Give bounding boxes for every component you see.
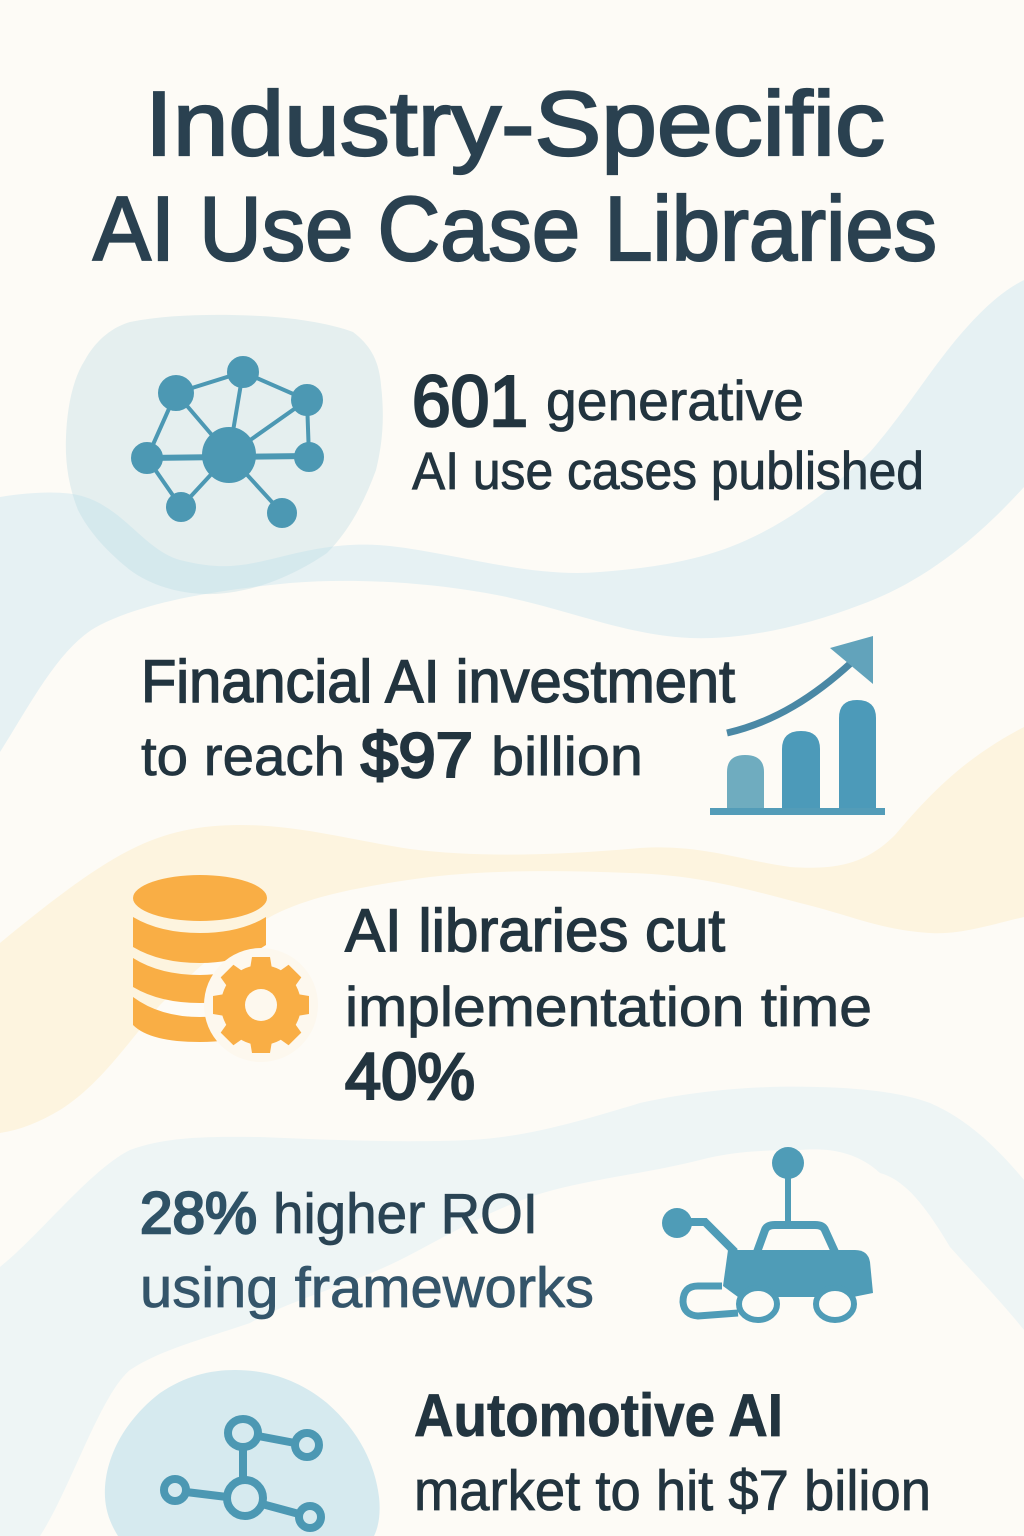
icon: linked nodes <box>164 1419 321 1528</box>
stat text: billion <box>491 725 643 787</box>
panel: financial <box>141 636 885 815</box>
stat text <box>140 1181 594 1320</box>
stat text: using frameworks <box>140 1256 594 1320</box>
icon: network <box>133 358 322 526</box>
stat text: Financial AI investment <box>141 648 735 715</box>
panel: automotive <box>105 1370 931 1536</box>
stat text: generative <box>546 369 804 432</box>
stat text: AI libraries cut <box>345 897 725 964</box>
stat text <box>414 1382 931 1523</box>
stat text: market to hit $7 bilion <box>414 1459 931 1523</box>
icon: database with gear <box>133 875 318 1062</box>
title: Industry-Specific <box>145 74 885 175</box>
stat text: AI use cases published <box>412 442 924 501</box>
title <box>93 74 937 280</box>
stat text: 40% <box>345 1039 475 1113</box>
stat text: 601 <box>412 362 528 442</box>
stat text <box>412 362 924 501</box>
icon: bar chart with arrow <box>710 636 885 815</box>
stat text: implementation time <box>345 975 872 1038</box>
icon blob: nodes background <box>105 1370 380 1536</box>
stat text: $97 <box>361 721 473 791</box>
title: AI Use Case Libraries <box>93 179 937 280</box>
panel: libraries <box>133 875 872 1113</box>
stat text: 28% <box>140 1181 257 1246</box>
stat text: to reach <box>141 725 345 787</box>
stat text: Automotive AI <box>414 1382 783 1449</box>
icon blob: network background <box>66 315 383 594</box>
panel: ROI <box>140 1147 873 1320</box>
stat text <box>345 897 872 1113</box>
icon: connected car <box>662 1147 873 1320</box>
panel: use cases <box>66 315 924 594</box>
stat text: higher ROI <box>273 1182 538 1246</box>
stat text <box>141 648 735 791</box>
